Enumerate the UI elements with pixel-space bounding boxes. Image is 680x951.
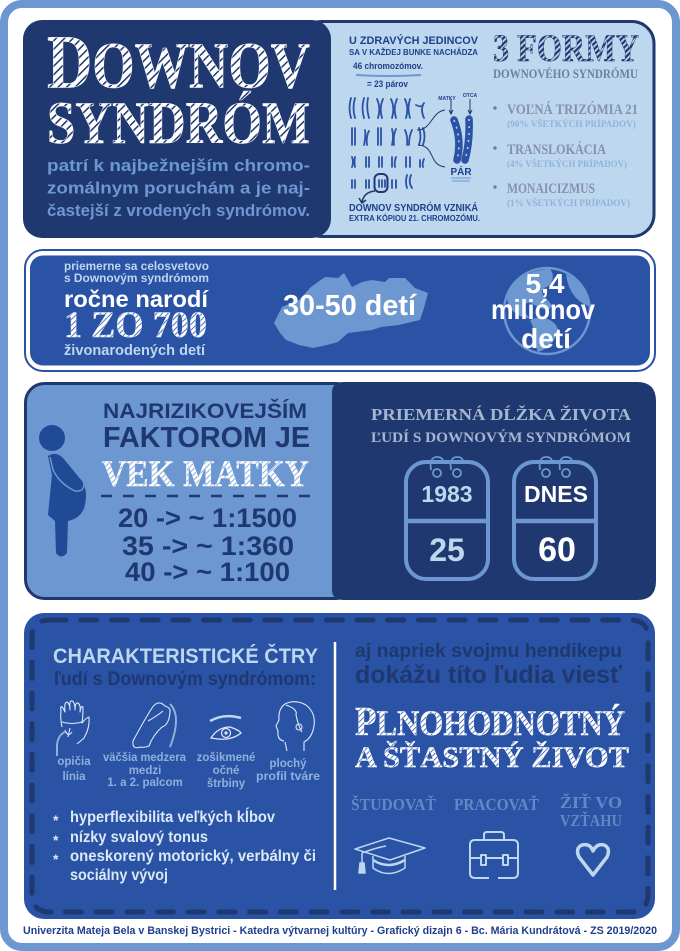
list of other features: * (53, 812, 59, 828)
icon: globe (504, 268, 590, 354)
calendar: today (513, 457, 597, 579)
life goals labels (351, 793, 622, 830)
characteristics subheading: ľudí s Downovým syndrómom: (54, 669, 316, 690)
downov syndrome caption (349, 201, 480, 223)
title (47, 20, 310, 156)
list of forms: MONAICIZMUS (507, 181, 595, 197)
risk ratios (118, 503, 297, 587)
list of forms: (1% VŠETKÝCH PRÍPADOV) (507, 196, 630, 209)
calendar: today: DNES (524, 481, 588, 507)
chromosome karyotype (350, 98, 424, 188)
life goals labels: ŠTUDOVAŤ (351, 795, 437, 814)
icon: graduation cap (355, 838, 425, 874)
title: SYNDRÓM (47, 90, 310, 156)
feature labels: očné (213, 765, 239, 777)
downov syndrome caption: DOWNOV SYNDRÓM VZNIKÁ (349, 201, 478, 214)
list of forms: (90% VŠETKÝCH PRÍPADOV) (507, 117, 636, 130)
calendar: 1983 (405, 457, 489, 579)
icon: hand (57, 701, 89, 756)
icon: foot (133, 703, 176, 748)
birth rate text: 1 ZO 700 (64, 305, 207, 346)
world number (491, 268, 595, 354)
calendar: 1983: 1983 (421, 481, 473, 507)
intro text block (47, 156, 310, 220)
risk ratios: 20 -> ~ 1:1500 (118, 503, 297, 533)
panel: forms and chromosomes background (300, 22, 654, 236)
chromosome 21 highlight (374, 174, 388, 192)
calendar: 1983: 25 (429, 532, 465, 568)
icon: eye (210, 716, 241, 739)
arrow: extra copy of chromosome 21 (359, 191, 375, 203)
list of other features: hyperflexibilita veľkých kĺbov (70, 808, 275, 826)
icon: briefcase (470, 832, 518, 878)
chromosome pair: PÁR (450, 165, 472, 178)
feature labels: medzi (129, 765, 161, 777)
mother's age highlight: VEK MATKY (102, 454, 309, 495)
chromosome pair: OTCA (463, 93, 477, 99)
lifespan heading: PRIEMERNÁ DĹŽKA ŽIVOTA (371, 405, 632, 424)
panel: risk background (26, 384, 356, 598)
list of other features: * (53, 832, 59, 848)
birth rate text: ročne narodí (64, 286, 210, 312)
risk ratios: 35 -> ~ 1:360 (122, 531, 294, 561)
chromosome pair: MATKY (438, 96, 456, 102)
panel background (24, 613, 655, 919)
panel: statistics (25, 250, 655, 371)
list of other features: sociálny vývoj (70, 867, 168, 884)
risk heading (103, 399, 310, 454)
life goals labels: VZŤAHU (560, 811, 622, 830)
icon: face profile (276, 702, 314, 751)
chromosome explanation heading: 46 chromozómov. (353, 61, 423, 71)
intro text block: častejší z vrodených syndrómov. (47, 201, 310, 220)
map of Slovakia (274, 273, 428, 348)
birth rate text: s Downovým syndrómom (64, 273, 209, 285)
feature labels: plochý (269, 758, 307, 770)
full life headline (355, 698, 629, 774)
closing statement: aj napriek svojmu hendikepu (355, 641, 622, 662)
lifespan heading: ĽUDÍ S DOWNOVÝM SYNDRÓMOM (371, 429, 631, 446)
panel background (25, 250, 655, 371)
chromosome pair (417, 93, 477, 181)
life goals labels: ŽIŤ VO (560, 793, 622, 812)
feature labels: línia (62, 771, 86, 783)
panel: introduction (23, 20, 654, 238)
birth rate text: priemerne sa celosvetovo (64, 261, 209, 273)
list of forms (493, 101, 638, 209)
list of other features: oneskorený motorický, verbálny či (70, 848, 316, 865)
list of forms: VOĽNÁ TRIZÓMIA 21 (507, 101, 638, 118)
full life headline: PLNOHODNOTNÝ (355, 698, 625, 744)
list of forms: TRANSLOKÁCIA (507, 141, 606, 158)
list of other features: nízky svalový tonus (70, 829, 208, 846)
downov syndrome caption: EXTRA KÓPIOU 21. CHROMOZÓMU. (349, 214, 480, 223)
feature labels: väčšia medzera (103, 752, 187, 764)
birth rate text (64, 261, 210, 359)
lifespan heading (371, 405, 632, 446)
intro text block: zomálnym poruchám a je naj- (47, 178, 310, 198)
risk ratios: 40 -> ~ 1:100 (125, 557, 290, 587)
feature labels: zošikmené (197, 752, 255, 764)
risk heading: FAKTOROM JE (103, 422, 310, 454)
panel: characteristics and life (24, 613, 655, 919)
calendar: today: 60 (538, 531, 576, 569)
feature labels: profil tváre (256, 771, 320, 783)
characteristics heading: CHARAKTERISTICKÉ ČTRY (53, 644, 318, 668)
world number: detí (521, 323, 572, 354)
world number: miliónov (491, 294, 595, 325)
title: DOWNOV (47, 20, 310, 104)
risk heading: NAJRIZIKOVEJŠÍM (103, 399, 307, 423)
subheading: forms: DOWNOVÉHO SYNDRÓMU (493, 66, 639, 81)
closing statement (355, 641, 622, 689)
Slovakia number: 30-50 detí (283, 290, 417, 322)
list of other features: * (53, 851, 59, 867)
world number: 5,4 (526, 268, 565, 299)
list of forms: (4% VŠETKÝCH PRÍPADOV) (507, 157, 627, 170)
chromosome explanation heading: U ZDRAVÝCH JEDINCOV (349, 34, 479, 47)
feature labels: opičia (57, 756, 91, 768)
list of other features (53, 808, 316, 884)
panel: lifespan background (332, 382, 656, 600)
feature labels: štrbiny (207, 778, 246, 790)
footer credits: Univerzita Mateja Bela v Banskej Bystrici - Katedra výtvarnej kultúry - Grafický dizajn 6 - Bc. Mária Kundrátová - ZS 2019/2020 (23, 925, 657, 937)
heading: three forms: 3 FORMY (493, 27, 639, 70)
intro text block: patrí k najbežnejším chromo- (47, 156, 310, 175)
panel: risk and lifespan (26, 382, 656, 600)
chromosome explanation heading: SA V KAŽDEJ BUNKE NACHÁDZA (349, 48, 478, 57)
full life headline: A ŠŤASTNÝ ŽIVOT (355, 741, 629, 774)
closing statement: dokážu títo ľudia viesť (355, 661, 622, 689)
life goals labels: PRACOVAŤ (454, 795, 540, 814)
feature labels (57, 752, 320, 790)
chromosome explanation heading: = 23 párov (367, 79, 408, 89)
birth rate text: živonarodených detí (64, 342, 206, 359)
chromosome explanation heading (349, 34, 479, 89)
panel: title background (23, 20, 331, 238)
icon: pregnant woman (39, 425, 86, 556)
icon: heart (578, 845, 608, 875)
feature labels: 1. a 2. palcom (107, 777, 183, 789)
